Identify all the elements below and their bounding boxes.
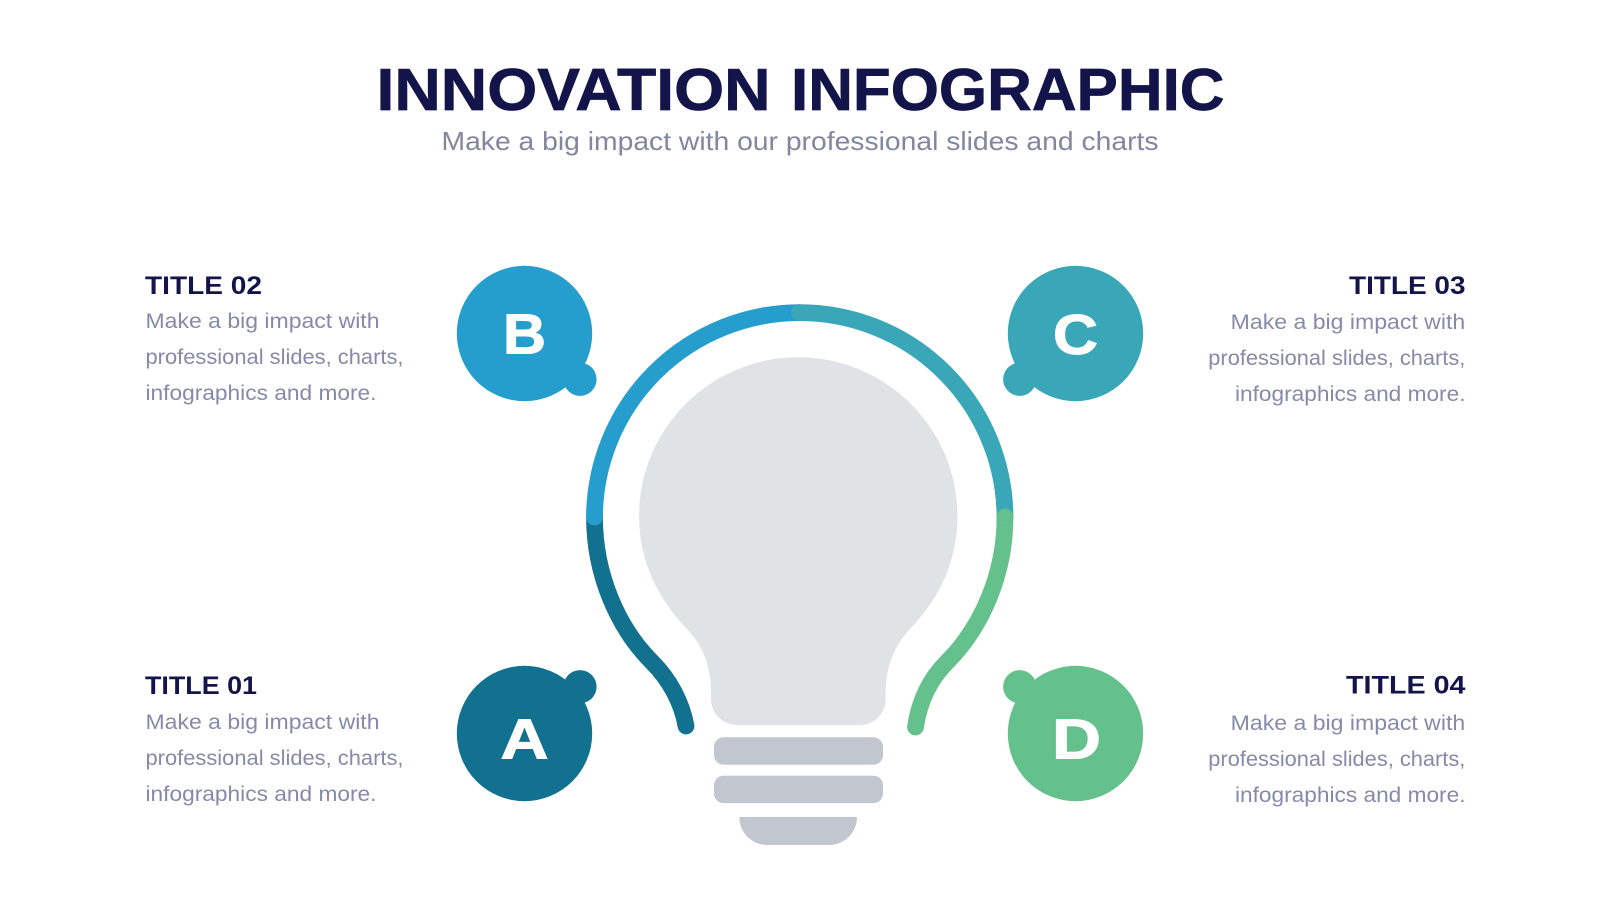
badge B: B [503, 302, 546, 366]
text block: title 03 [1208, 272, 1466, 406]
bulb base ring 1 [714, 737, 883, 765]
bulb glass [639, 357, 958, 725]
outline segment C [800, 313, 1005, 517]
badge C [1003, 266, 1143, 401]
badge A [457, 666, 597, 801]
text block: title 01: Make a big impact with [146, 710, 380, 734]
bulb base ring 2 [714, 776, 883, 803]
text block: title 03: infographics and more. [1235, 382, 1466, 406]
text block: title 01 [145, 672, 404, 806]
text block: title 04: Make a big impact with [1231, 711, 1465, 735]
text block: title 01: professional slides, charts, [146, 746, 404, 770]
subtitle: Make a big impact with our professional slides and charts [442, 126, 1158, 156]
text block: title 03: professional slides, charts, [1208, 346, 1465, 370]
text block: title 04: TITLE 04 [1346, 672, 1466, 700]
text block: title 04 [1208, 672, 1466, 807]
text block: title 02: TITLE 02 [145, 272, 262, 300]
text block: title 03: Make a big impact with [1231, 310, 1465, 334]
text block: title 04: professional slides, charts, [1208, 747, 1465, 771]
outline segment D [916, 517, 1005, 727]
badge B [457, 266, 597, 401]
segment C start cap [791, 304, 808, 321]
text block: title 02: Make a big impact with [146, 309, 380, 333]
outline segment B [594, 313, 800, 517]
bulb base cap [739, 817, 857, 845]
badge D: D [1052, 708, 1101, 772]
segment B start cap [586, 509, 603, 525]
text block: title 01: TITLE 01 [145, 672, 257, 700]
title: INNOVATION [376, 57, 770, 123]
badge A: A [500, 708, 548, 772]
badge D [1003, 666, 1143, 801]
title: INFOGRAPHIC [791, 57, 1224, 123]
badge C: C [1053, 303, 1098, 367]
text block: title 01: infographics and more. [146, 782, 376, 806]
title [376, 57, 1224, 123]
text block: title 02: professional slides, charts, [146, 345, 404, 369]
text block: title 02: infographics and more. [146, 381, 376, 405]
text block: title 04: infographics and more. [1235, 783, 1466, 807]
segment D start cap [997, 509, 1013, 525]
outline segment A [594, 517, 686, 726]
text block: title 02 [145, 272, 404, 405]
lightbulb illustration [586, 304, 1013, 845]
text block: title 03: TITLE 03 [1349, 272, 1466, 300]
